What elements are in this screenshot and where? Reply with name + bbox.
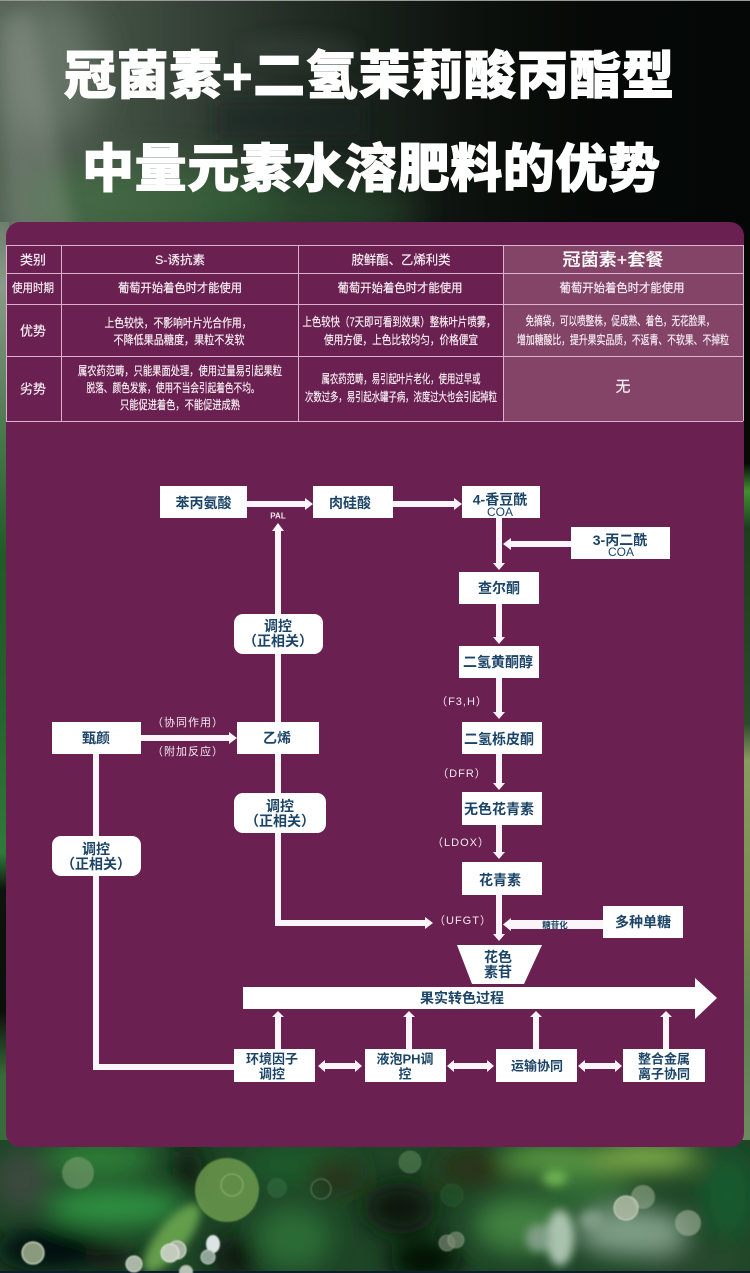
label: 糖苷化: 糖苷化: [542, 920, 568, 930]
pill: 调控 left: （正相关）: [61, 856, 131, 872]
node: 运输协同: 运输协同: [511, 1058, 563, 1074]
table row: 类别: [20, 250, 664, 270]
node: 整合金属离子协同: 离子协同: [638, 1066, 690, 1082]
node: 多种单糖: [603, 906, 683, 938]
big arrow: 果实转色过程: [243, 978, 717, 1019]
node: 液泡PH调控: 液泡PH调: [376, 1052, 434, 1066]
node: 甄颜: 甄颜: [82, 730, 110, 746]
node: 甄颜: [52, 722, 141, 754]
node: 花青素: [462, 862, 542, 895]
node: 整合金属离子协同: 整合金属: [638, 1052, 690, 1066]
table row: 劣势: 属农药范畴，只能果面处理，使用过量易引起果粒: [78, 363, 282, 378]
arrow: 肉硅酸 to 4-香豆酰: [393, 498, 462, 510]
table row: 优势: 不降低果品糖度，果粒不发软: [114, 332, 244, 347]
node: 肉硅酸: 肉硅酸: [329, 495, 371, 511]
label: 附加反应: （附加反应）: [152, 744, 224, 758]
table row: 类别: 类别: [20, 252, 46, 268]
table row: 使用时期: 葡萄开始着色时才能使用: [338, 280, 462, 295]
table row: 优势: 使用方便，上色比较均匀，价格便宜: [324, 332, 478, 347]
connectors and arrows: [93, 498, 672, 1072]
node: 多种单糖: 多种单糖: [615, 914, 671, 930]
arrow: 无色花青素 to 花青素: [493, 825, 505, 859]
table row: 劣势: 次数过多，易引起水罐子病，浓度过大也会引起掉粒: [305, 389, 497, 404]
arrow: 苯丙氨酸 to 肉硅酸: [247, 498, 313, 510]
table row: 使用时期: 使用时期: [12, 280, 54, 295]
label: PAL: PAL: [270, 512, 286, 520]
arrows: factors up to colour process: [272, 1011, 284, 1049]
table row: 优势: [20, 313, 729, 347]
node: 乙烯: [237, 722, 319, 754]
bokeh circles: [22, 1151, 701, 1273]
table row: 劣势: 脱落、颜色发紫，使用不当会引起着色不均。: [86, 380, 260, 395]
node: 环境因子调控: 调控: [259, 1066, 285, 1082]
title: 冠菌素+二氢茉莉酸丙酯型: [64, 48, 674, 106]
node: 4-香豆酰COA: 4-香豆酰: [473, 492, 527, 508]
table row: 类别: 冠菌素+套餐: [562, 250, 664, 270]
node: 液泡PH调控: 控: [398, 1066, 412, 1082]
pill: 调控 upper: （正相关）: [243, 633, 313, 649]
label: LDOX: （LDOX）: [432, 836, 490, 849]
double arrows between factors: [318, 1060, 362, 1072]
table row: 使用时期: 葡萄开始着色时才能使用: [118, 280, 242, 295]
node: 二氢黄酮醇: 二氢黄酮醇: [463, 654, 533, 670]
node: 花青素: 花青素: [479, 872, 521, 888]
node: 查尔酮: 查尔酮: [478, 580, 520, 596]
node: 无色花青素: 无色花青素: [464, 801, 534, 817]
label: F3,H: （F3,H）: [436, 695, 488, 708]
pill: 调控 left: 调控: [82, 841, 110, 857]
big arrow: 果实转色过程: 果实转色过程: [420, 990, 504, 1006]
node: 花色素苷: 素苷: [484, 964, 512, 980]
arrow: 花青素 to 花色素苷: [493, 895, 505, 941]
pill: 调控 middle: [234, 793, 326, 833]
node: 无色花青素: [462, 792, 542, 825]
node: 二氢黄酮醇: [459, 646, 539, 678]
arrow: 多种单糖 to chain: [503, 918, 603, 931]
highlighted column: [504, 245, 743, 421]
node: 整合金属离子协同: [623, 1049, 705, 1082]
node: 3-丙二酰COA: COA: [608, 545, 634, 559]
pill: 调控 left: [52, 836, 141, 876]
flow diagram: anthocyanin pathway: [52, 486, 717, 1082]
table row: 劣势: 无: [615, 378, 631, 396]
node: 环境因子调控: [234, 1049, 315, 1082]
node: 运输协同: [496, 1049, 577, 1082]
pill: 调控 middle: （正相关）: [245, 813, 315, 829]
node: 4-香豆酰COA: COA: [487, 505, 513, 519]
table row: 优势: 上色较快（7天即可看到效果）整株叶片喷雾，: [302, 314, 496, 329]
node: 环境因子调控: 环境因子: [246, 1052, 298, 1066]
arrow: 查尔酮 to 二氢黄酮醇: [493, 604, 505, 644]
node: 4-香豆酰COA: [462, 486, 540, 519]
table row: 使用时期: [12, 280, 684, 295]
node: 乙烯: 乙烯: [263, 730, 291, 746]
table row: 使用时期: 葡萄开始着色时才能使用: [560, 280, 684, 295]
panel: main purple card: [6, 222, 744, 1147]
node: 花色素苷: [457, 945, 542, 984]
line: 甄颜 to 环境因子: [93, 754, 234, 1070]
table row: 类别: 胺鲜酯、乙烯利类: [352, 252, 450, 268]
table row: 劣势: 劣势: [20, 382, 46, 396]
node: 二氢栎皮酮: 二氢栎皮酮: [464, 731, 534, 747]
title: 中量元素水溶肥料的优势: [82, 141, 660, 199]
table row: 优势: 上色较快，不影响叶片光合作用，: [104, 315, 252, 330]
pill: 调控 upper: 调控: [264, 618, 292, 634]
node: 3-丙二酰COA: 3-丙二酰: [593, 532, 647, 548]
arrow: 4-香豆酰 to 查尔酮: [493, 518, 505, 570]
pill: 调控 upper: [234, 614, 323, 654]
arrow: 二氢黄酮醇 to 二氢栎皮酮: [493, 678, 505, 719]
arrow: 乙烯 up to PAL: [272, 523, 284, 722]
table row: 优势: 优势: [20, 324, 46, 338]
node: 液泡PH调控: [365, 1049, 446, 1082]
node: 肉硅酸: [313, 486, 393, 518]
node: 花色素苷: 花色: [484, 949, 512, 965]
arrow: 乙烯 down to UFGT: [275, 754, 433, 929]
arrow: 3-丙二酰 to chain: [503, 538, 571, 550]
node: 3-丙二酰COA: [571, 527, 670, 559]
node: 苯丙氨酸: 苯丙氨酸: [176, 495, 232, 511]
table row: 类别: S-诱抗素: [155, 252, 205, 267]
node: 二氢栎皮酮: [462, 722, 542, 754]
comparison table: [6, 245, 744, 422]
table row: 劣势: [20, 363, 631, 412]
label: 协同作用: （协同作用）: [152, 715, 224, 729]
label: UFGT: （UFGT）: [434, 914, 492, 927]
label: DFR: （DFR）: [437, 767, 487, 780]
arrow: 二氢栎皮酮 to 无色花青素: [493, 754, 505, 790]
title: [64, 48, 674, 199]
pill: 调控 middle: 调控: [266, 798, 294, 814]
soft foliage blobs: [0, 1142, 750, 1273]
table row: 劣势: 属农药范畴，易引起叶片老化，使用过早或: [322, 371, 480, 386]
node: 苯丙氨酸: [160, 486, 247, 518]
node: 查尔酮: [459, 572, 539, 604]
table row: 劣势: 只能促进着色，不能促进成熟: [120, 397, 240, 412]
arrow: 甄颜 to 乙烯: [141, 732, 237, 744]
